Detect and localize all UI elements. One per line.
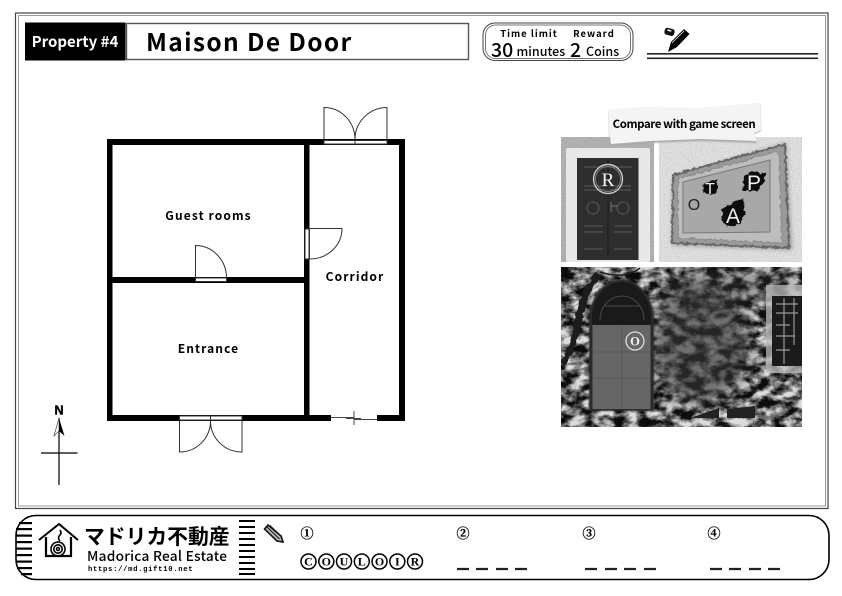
marker: letter A: A [726,205,740,228]
time limit and reward badge: 2 [570,34,581,63]
answer 1: O [322,555,331,569]
marker: letter P [743,171,766,195]
answer 1: O [375,555,384,569]
answer 1: ① [300,523,314,542]
time limit and reward badge: Coins [586,41,619,60]
marker: letter T: T [705,181,715,198]
answer 1: U [340,555,349,569]
window [766,285,802,373]
header: property number [25,22,126,60]
room label: guest rooms: Guest rooms [165,207,252,224]
answer 1: I [395,555,400,569]
answer 2: ② [456,523,470,542]
brand name: https://md.gift10.net [88,566,193,574]
header: property title: Maison De Door [146,24,353,59]
photo: arched door in shaded wall [561,267,802,427]
answer 4 [707,523,780,569]
answer 3: ③ [582,523,596,542]
floor plan [107,108,405,452]
answer 1: C [304,555,313,569]
footer panel [16,516,829,580]
brand name: マドリカ不動産 [84,520,230,550]
answer 3 [582,523,656,569]
door: corridor side [305,228,342,259]
door: south double door [180,416,242,452]
photo: door with letter R [561,137,654,262]
marker: letter O: O [630,334,640,348]
marker: letter P: P [747,172,761,195]
answer 1 [300,523,422,569]
logo: house with spiral [39,524,78,556]
icon: pencil [664,27,690,52]
arched door [589,279,654,411]
right stripes [239,520,255,575]
time limit and reward badge: Reward [573,26,615,40]
marker: letter O: O [688,197,700,214]
walls [107,139,405,421]
time limit and reward badge: Time limit [500,26,558,40]
note: compare with game screen [609,103,761,147]
brand name: Madorica Real Estate [87,545,227,565]
time limit and reward badge: minutes [516,41,565,60]
answer 1: L [358,555,366,569]
room label: corridor: Corridor [326,268,384,285]
door: guest rooms [196,246,226,282]
room label: entrance: Entrance [178,340,239,357]
marker: letter O [626,332,644,350]
basement openings [693,406,755,418]
header: property number: Property #4 [32,31,118,52]
answer 4: ④ [707,523,721,542]
note: compare with game screen: Compare with game screen [613,116,755,132]
brand name [84,520,230,574]
time limit and reward badge: 30 [491,34,513,63]
memo: pencil and lines [647,27,818,59]
sliding door [331,411,377,425]
marker: letter A [722,198,745,228]
photo: picture frame with letters [659,137,802,262]
marker: letter R: R [602,170,615,191]
answer 1: R [411,555,420,569]
header: property title [126,24,468,60]
answer 2 [456,523,527,569]
marker: letter T [703,180,717,198]
tree trunk [561,272,602,368]
north arrow: N [54,404,64,418]
time limit and reward badge [483,23,633,63]
north arrow [41,404,78,485]
icon: answer pencil [264,525,283,542]
door: north double door [324,108,387,144]
left stripes [16,522,32,575]
